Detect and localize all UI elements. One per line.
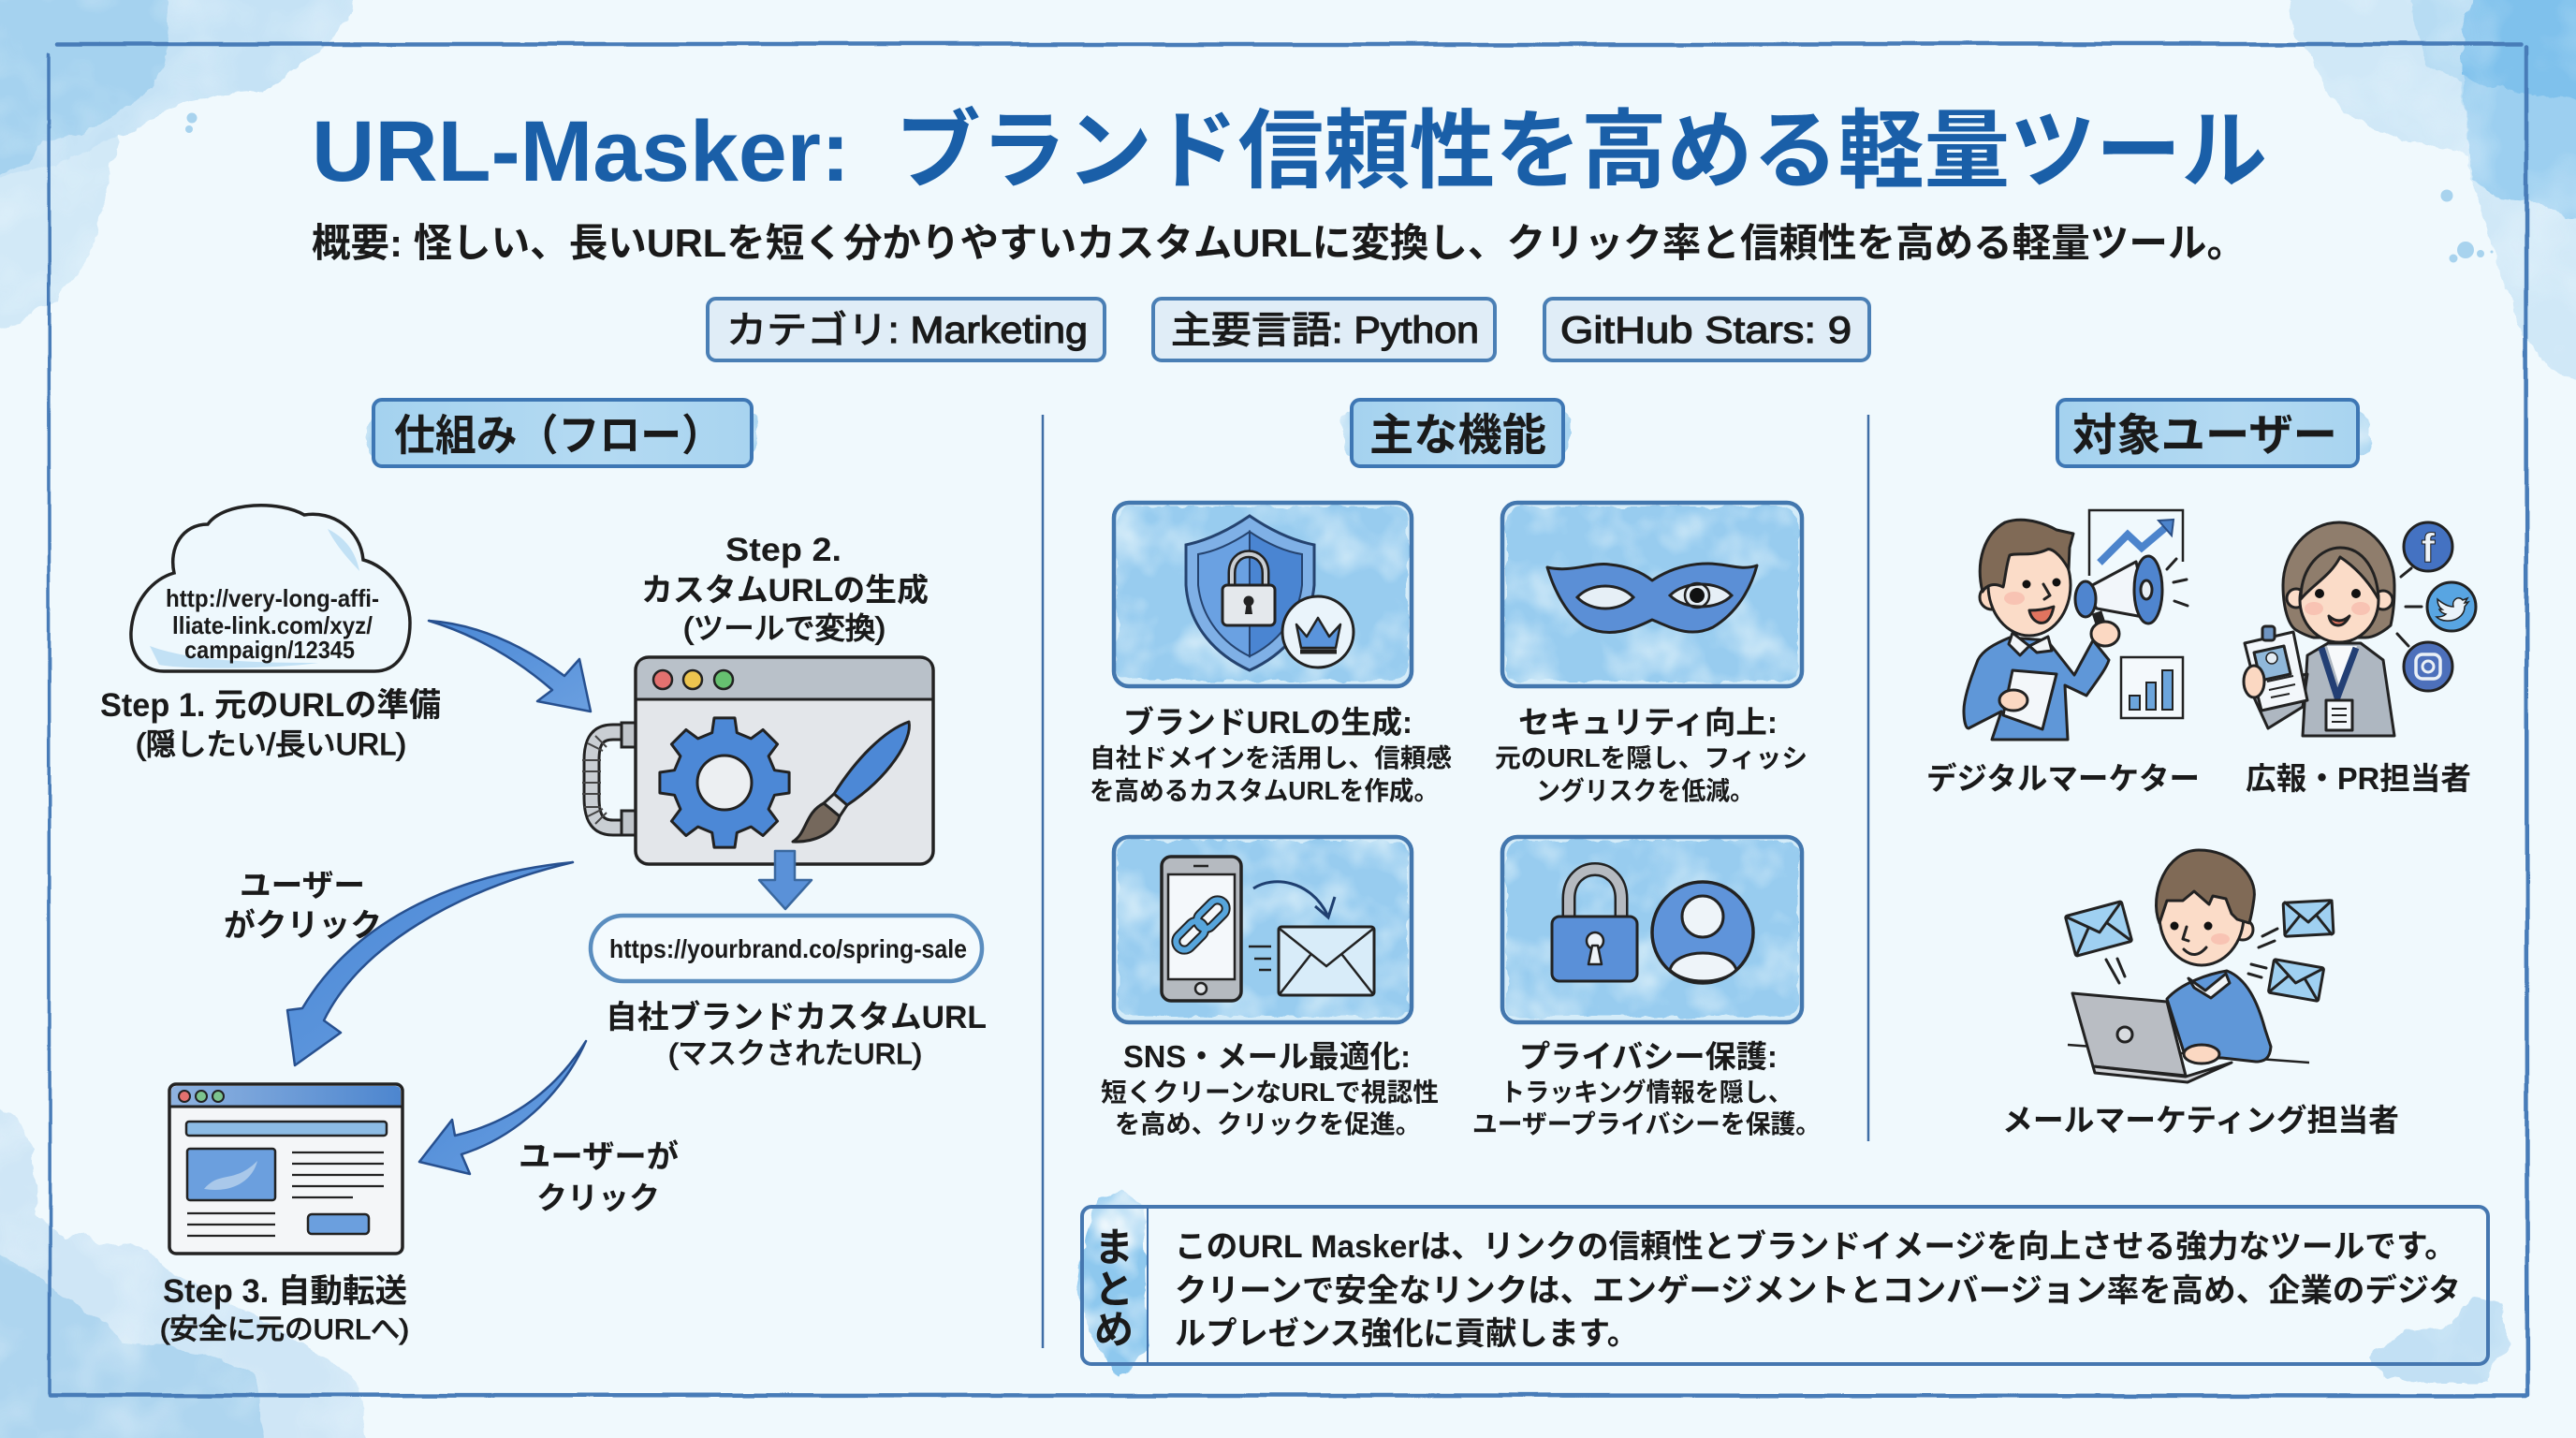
icon: destination browser window xyxy=(169,1084,402,1254)
label: user clicks left xyxy=(224,868,382,944)
card: privacy icon xyxy=(1502,837,1802,1022)
title: URL-Masker: xyxy=(312,104,850,199)
step 2 label: (ツールで変換) xyxy=(683,611,886,645)
branded url label: (マスクされたURL) xyxy=(668,1037,922,1070)
label: user clicks left: ユーザー xyxy=(240,868,365,902)
card: security icon xyxy=(1502,503,1802,686)
card: sns mail text: SNS・メール最適化: xyxy=(1123,1039,1411,1074)
summary text: このURL Maskerは、リンクの信頼性とブランドイメージを向上させる強力なツールです。 xyxy=(1175,1228,2456,1265)
label: user clicks left: がクリック xyxy=(224,907,382,944)
illustration: email marketer xyxy=(2065,850,2334,1082)
tag: github stars xyxy=(1544,299,1869,360)
heading: target users: 対象ユーザー xyxy=(2072,410,2337,460)
label: email marketer: メールマーケティング担当者 xyxy=(2002,1103,2399,1137)
panel: flow xyxy=(100,400,987,1345)
summary tab xyxy=(1094,1208,1148,1363)
card: privacy text: プライバシー保護: xyxy=(1519,1039,1778,1074)
subtitle: 概要: 怪しい、長いURLを短く分かりやすいカスタムURLに変換し、クリック率と信頼性を高める軽量ツール。 xyxy=(312,221,2246,265)
heading: features: 主な機能 xyxy=(1369,410,1546,460)
card: security text: ングリスクを低減。 xyxy=(1536,776,1754,805)
card and tab wash layer xyxy=(367,408,2370,1376)
branded url label: 自社ブランドカスタムURL xyxy=(606,999,987,1035)
card: sns mail icon xyxy=(1114,837,1412,1022)
arrow: step 1 to step 2 xyxy=(429,621,591,712)
card: brand url text: 自社ドメインを活用し、信頼感 xyxy=(1090,743,1452,772)
tag: category xyxy=(708,299,1105,360)
tag: language xyxy=(1153,299,1495,360)
summary box xyxy=(1082,1207,2488,1364)
panel: target users xyxy=(1926,400,2476,1137)
card: sns mail text: 短くクリーンなURLで視認性 xyxy=(1101,1078,1439,1107)
label: digital marketer: デジタルマーケター xyxy=(1926,761,2200,796)
arrow: to destination, left xyxy=(287,862,573,1065)
summary tab: と xyxy=(1094,1268,1134,1312)
icon: tool window with gear and brush xyxy=(582,657,933,864)
label: user clicks right xyxy=(519,1138,679,1215)
icon: cloud with long url: lliate-link.com/xyz/ xyxy=(172,611,373,639)
step 2 label xyxy=(641,532,929,645)
card: privacy text: ユーザープライバシーを保護。 xyxy=(1472,1109,1821,1138)
tag: category: カテゴリ: Marketing xyxy=(726,310,1088,351)
branded url pill: https://yourbrand.co/spring-sale xyxy=(609,934,967,963)
step 3 label: (安全に元のURLへ) xyxy=(160,1314,409,1345)
panel: summary xyxy=(1082,1207,2488,1364)
card: sns mail text: を高め、クリックを促進。 xyxy=(1115,1109,1421,1138)
illustration: pr staff xyxy=(2244,522,2422,736)
title: ブランド信頼性を高める軽量ツール xyxy=(895,104,2267,199)
label: user clicks right: ユーザーが xyxy=(519,1138,679,1175)
icon: facebook xyxy=(2404,522,2452,571)
branded url label xyxy=(606,999,987,1070)
icon: cloud with long url xyxy=(131,506,410,671)
card: privacy text xyxy=(1472,1039,1821,1138)
summary tab: め xyxy=(1094,1308,1134,1352)
panel: features xyxy=(1090,400,1821,1138)
step 2 label: カスタムURLの生成 xyxy=(641,573,929,609)
branded url pill xyxy=(591,916,982,981)
card: sns mail text xyxy=(1101,1039,1439,1138)
illustration: digital marketer xyxy=(1964,510,2188,740)
arrow: down to branded url xyxy=(759,851,812,909)
heading: flow: 仕組み（フロー） xyxy=(394,411,723,460)
step 2 label: Step 2. xyxy=(725,532,842,568)
card: brand url text: を高めるカスタムURLを作成。 xyxy=(1090,776,1439,805)
step 3 label: Step 3. 自動転送 xyxy=(163,1273,407,1310)
label: pr staff: 広報・PR担当者 xyxy=(2246,761,2471,796)
summary tab: ま xyxy=(1094,1225,1134,1269)
icon: instagram xyxy=(2404,642,2452,691)
icon: cloud with long url: campaign/12345 xyxy=(184,636,355,664)
paint splatter dots xyxy=(185,112,2494,262)
card: security text: セキュリティ向上: xyxy=(1518,705,1778,740)
card: security text: 元のURLを隠し、フィッシ xyxy=(1495,743,1808,772)
icon: twitter xyxy=(2427,582,2476,631)
card: brand url text: ブランドURLの生成: xyxy=(1123,705,1412,740)
summary text: ルプレゼンス強化に貢献します。 xyxy=(1175,1316,1638,1352)
heading: flow xyxy=(373,400,752,466)
title xyxy=(312,104,2267,199)
step 1 label xyxy=(100,687,441,761)
heading: features xyxy=(1352,400,1563,466)
arrow: to destination, right xyxy=(419,1041,586,1174)
summary text: クリーンで安全なリンクは、エンゲージメントとコンバージョン率を高め、企業のデジタ xyxy=(1175,1272,2461,1309)
column dividers xyxy=(1043,415,1868,1348)
tag: language: 主要言語: Python xyxy=(1171,310,1479,351)
card: privacy text: トラッキング情報を隠し、 xyxy=(1500,1078,1793,1107)
card: brand url text xyxy=(1090,705,1452,805)
tag: github stars: GitHub Stars: 9 xyxy=(1560,310,1852,351)
step 1 label: Step 1. 元のURLの準備 xyxy=(100,687,441,724)
step 1 label: (隠したい/長いURL) xyxy=(136,727,406,761)
icon: cloud with long url: http://very-long-affi- xyxy=(166,584,379,612)
label: user clicks right: クリック xyxy=(536,1181,660,1215)
heading: target users xyxy=(2057,400,2358,466)
step 3 label xyxy=(160,1273,409,1345)
card: brand url icon xyxy=(1114,503,1412,686)
icon: facebook: f xyxy=(2422,525,2436,571)
card: security text xyxy=(1495,705,1808,805)
summary text xyxy=(1175,1228,2461,1352)
